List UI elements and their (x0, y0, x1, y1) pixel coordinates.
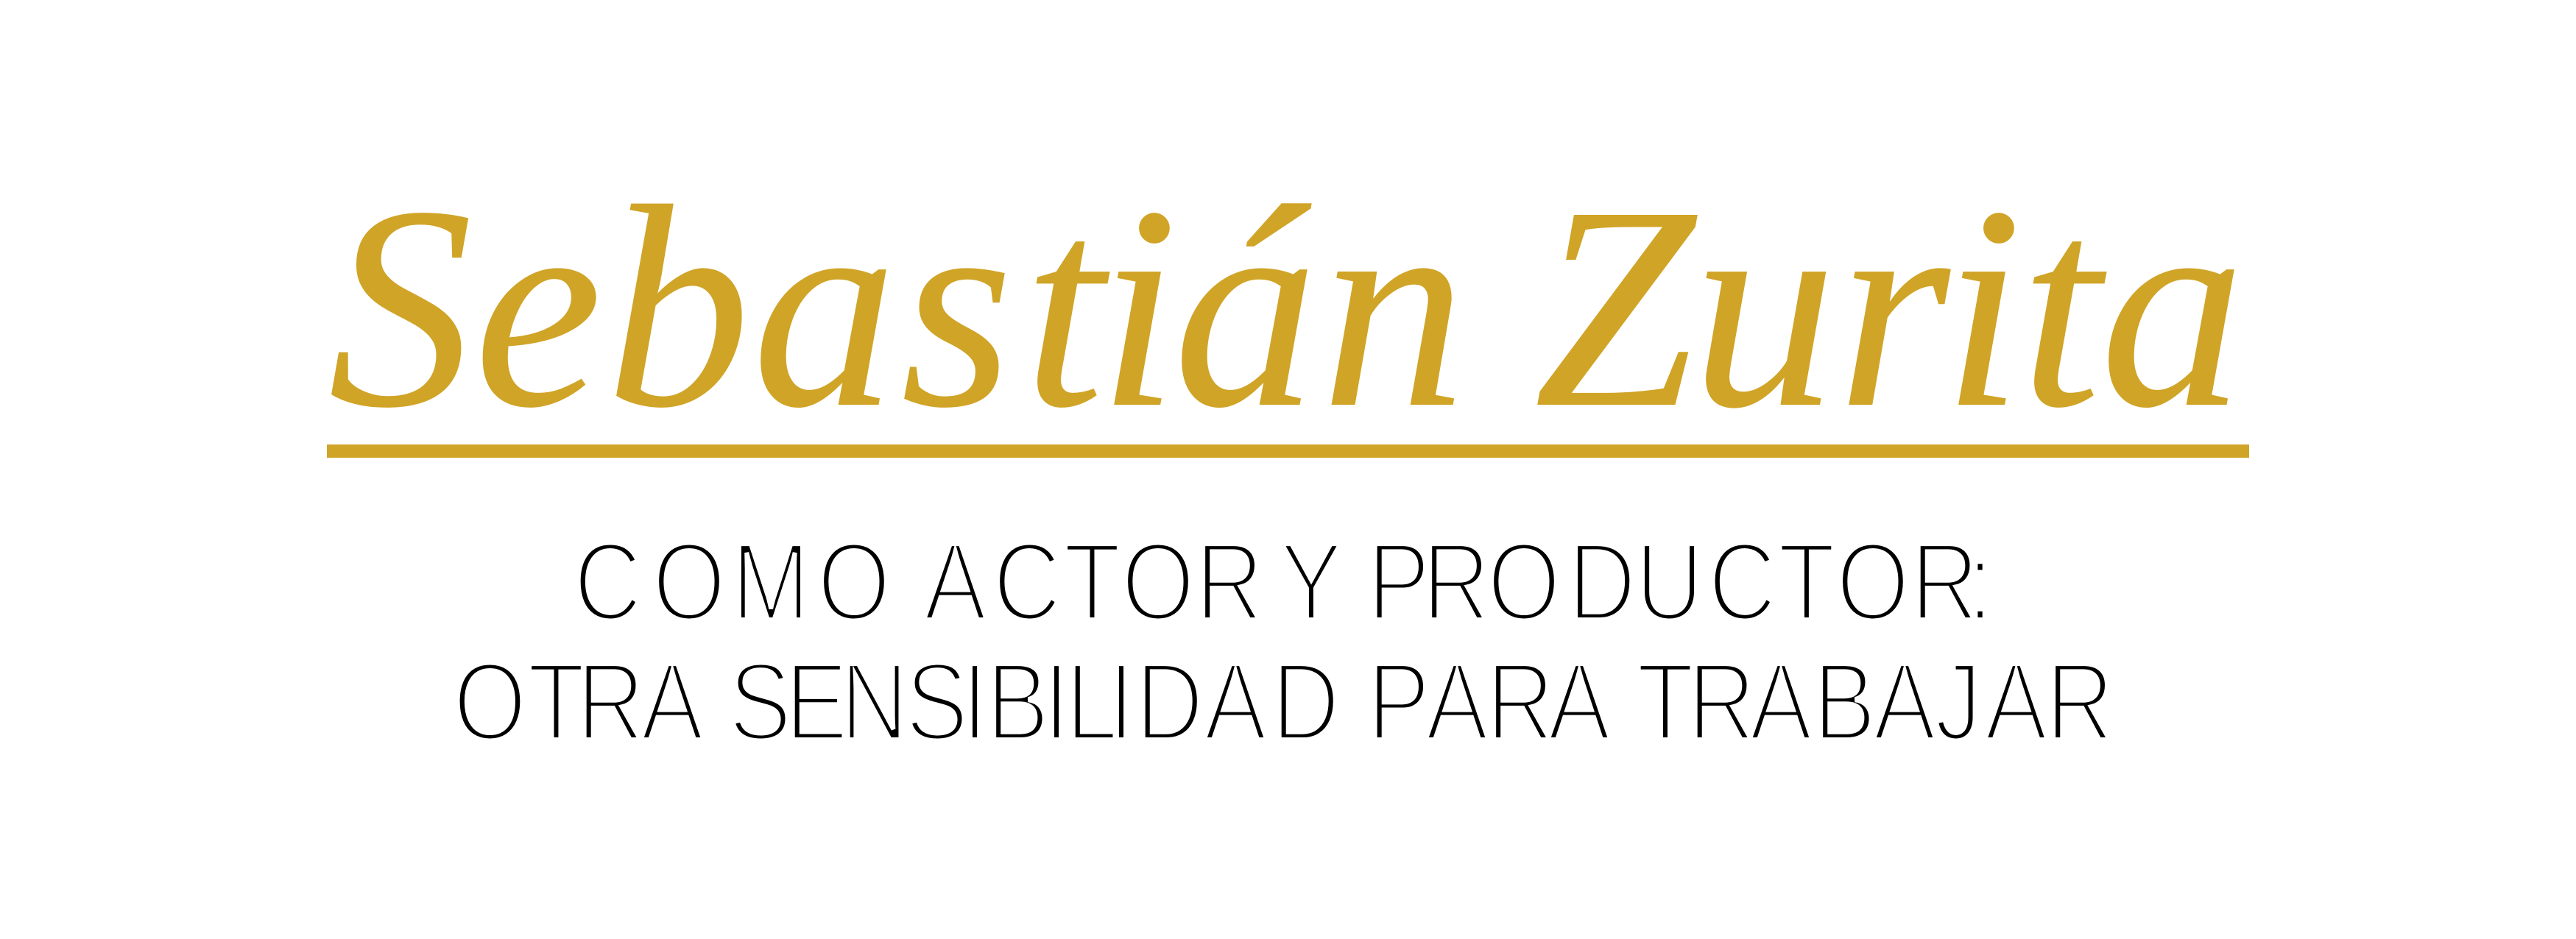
subtitle line 1: COMO ACTOR Y PRODUCTOR: (574, 520, 1993, 644)
subtitle line 2: OTRA SENSIBILIDAD PARA TRABAJAR (454, 639, 2114, 764)
title: Sebastián Zurita (328, 147, 2245, 468)
subtitle (454, 520, 2114, 764)
divider rule (327, 444, 2249, 458)
